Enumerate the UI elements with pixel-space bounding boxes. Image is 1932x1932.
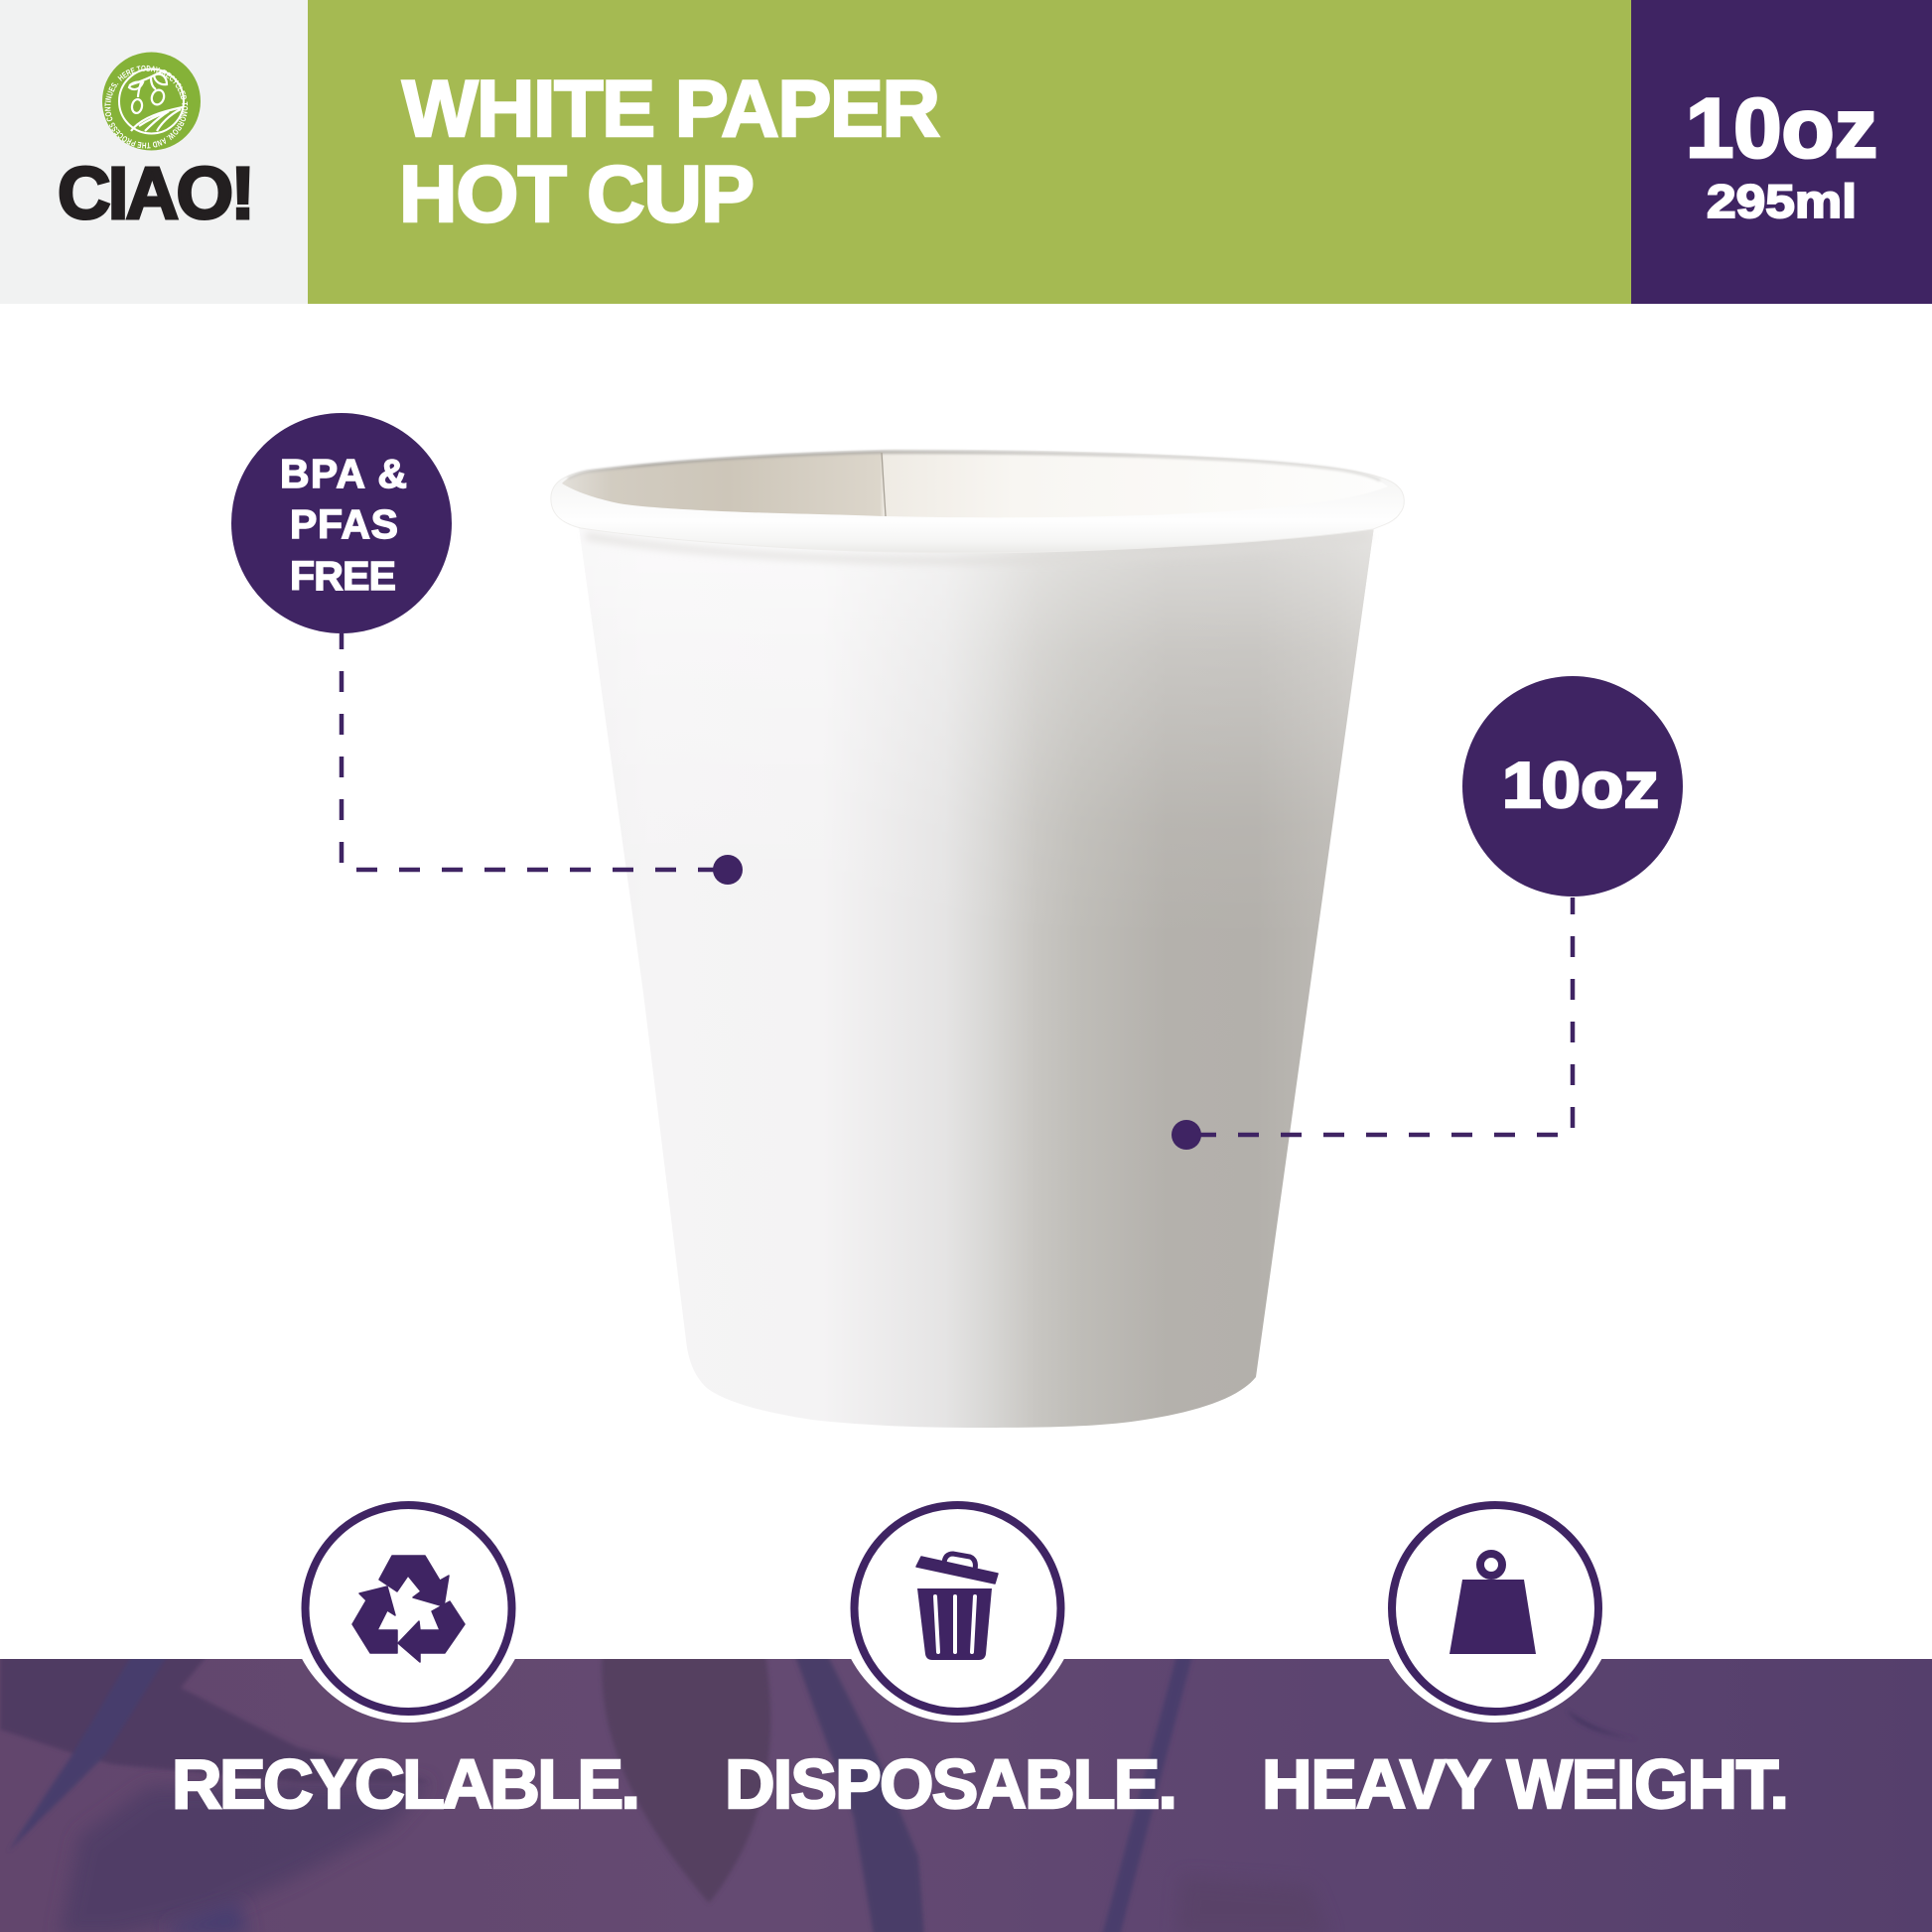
logo badge: HERE TODAY, RECYCLED TOMORROW. AND THE PROCESS CONTINUES. <box>105 66 189 149</box>
feature: disposable <box>725 1480 1177 1823</box>
cup rim shadow <box>586 536 1370 561</box>
connector dot <box>1172 1120 1201 1150</box>
header: logo panel <box>0 0 308 304</box>
cup photo <box>551 450 1404 1428</box>
callout: 10oz <box>1172 676 1683 1150</box>
header: title panel <box>308 0 1631 304</box>
logo wordmark: CIAO! <box>58 152 255 234</box>
cup interior <box>562 452 1388 517</box>
label: DISPOSABLE. <box>725 1745 1177 1823</box>
size ounces: 10oz <box>1686 81 1877 175</box>
badge text <box>280 451 407 599</box>
title <box>399 65 940 239</box>
badge text: 10oz <box>1502 749 1659 821</box>
icon: recycle <box>288 1480 530 1723</box>
cup rim <box>551 450 1404 553</box>
title: HOT CUP <box>399 150 755 239</box>
connector line <box>342 633 728 870</box>
title: WHITE PAPER <box>402 65 940 154</box>
feature: heavy weight <box>1262 1480 1789 1823</box>
icon: weight <box>1374 1480 1616 1723</box>
badge text: BPA & <box>280 451 407 496</box>
cup inner edge shadow <box>568 453 1380 481</box>
cup seam <box>882 453 886 516</box>
badge text: FREE <box>290 553 396 599</box>
label: RECYCLABLE. <box>172 1745 640 1823</box>
badge circle <box>231 413 452 633</box>
label: HEAVY WEIGHT. <box>1262 1745 1789 1823</box>
badge circle <box>1462 676 1683 897</box>
size millilitres: 295ml <box>1707 175 1857 227</box>
feature: recyclable <box>172 1480 640 1823</box>
cup body <box>579 526 1374 1428</box>
footer band with leaves <box>0 1648 1932 1932</box>
header: size panel <box>1631 0 1932 304</box>
connector dot <box>713 855 743 885</box>
connector line <box>1186 897 1573 1135</box>
callout: BPA and PFAS free <box>231 413 743 885</box>
badge text: PFAS <box>290 501 398 547</box>
icon: trash can <box>836 1480 1078 1723</box>
